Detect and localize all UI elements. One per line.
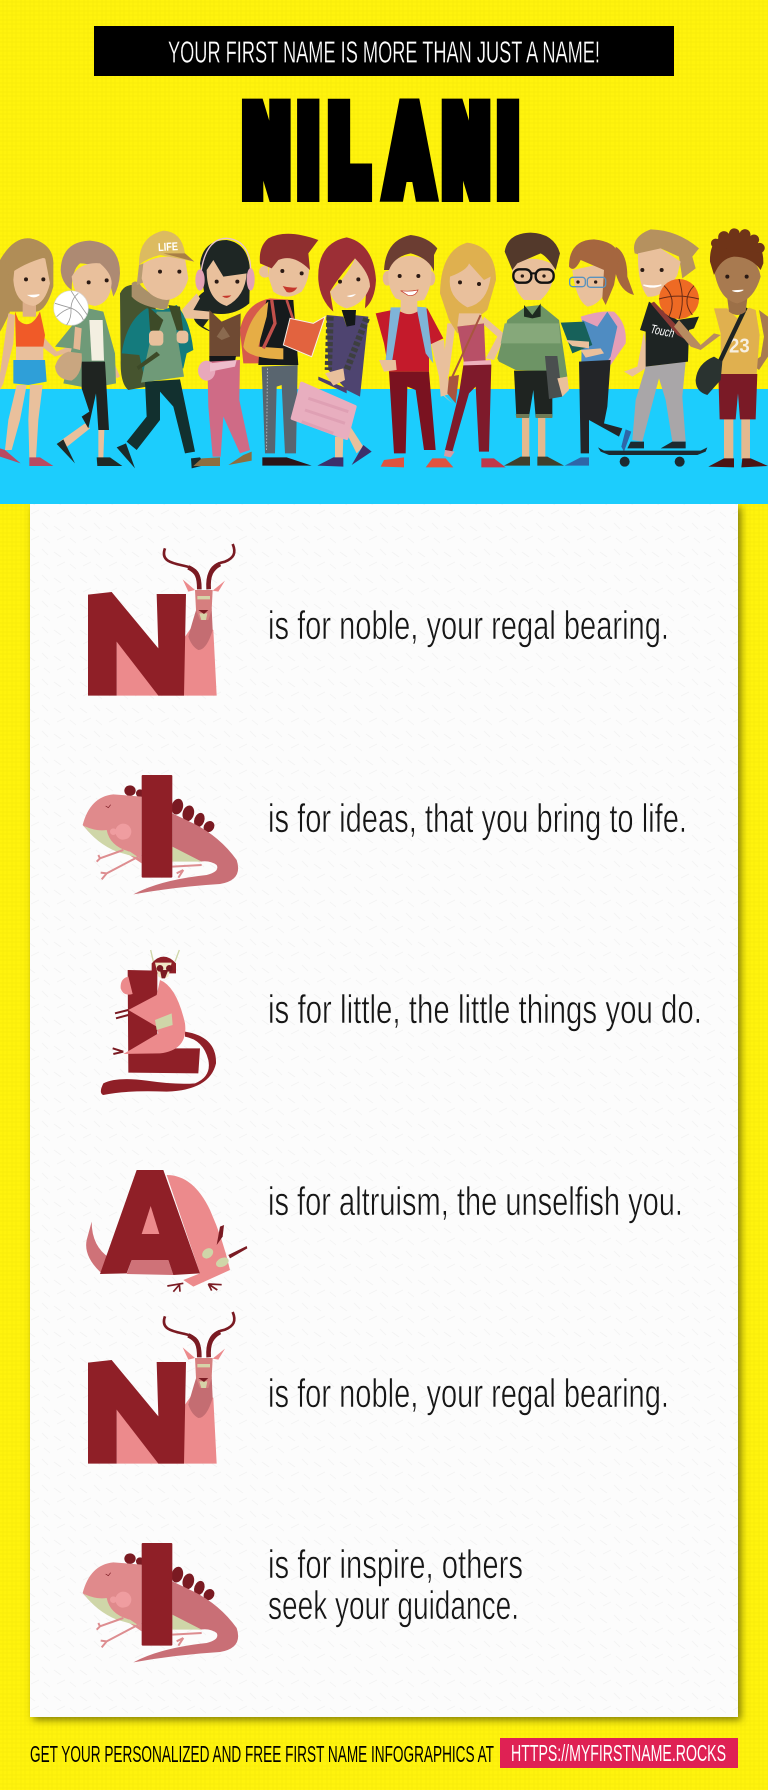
person 8: blonde girl — [440, 243, 506, 467]
row 5: second letter N with antelope — [88, 1312, 669, 1464]
person 7: boy in red t-shirt — [376, 235, 453, 467]
text: second I line — [268, 1543, 523, 1628]
icon: lemur L — [101, 950, 216, 1095]
row 1: letter N with antelope — [88, 544, 669, 696]
person 3: boy with cap and backpack: LIFE — [158, 241, 179, 254]
icon: lizard I — [83, 1543, 238, 1662]
icon: basketball — [659, 279, 699, 319]
person 12: boy in yellow tank top: 23 — [729, 335, 750, 358]
person 6: girl with pink handbag — [292, 237, 376, 467]
panel: white letter list — [30, 504, 738, 1717]
illustration: group of twelve students — [0, 228, 768, 468]
icon: antelope N — [88, 1312, 234, 1464]
person 1: girl in orange top — [0, 238, 82, 466]
left six students — [0, 231, 376, 468]
person 3: boy with cap and backpack — [117, 231, 205, 468]
text: second I line: is for inspire, others — [268, 1543, 523, 1587]
person 5: boy reading a book — [240, 234, 325, 466]
row 4: letter A with armadillo — [86, 1170, 683, 1292]
banner: top tagline bar — [94, 26, 674, 76]
row 2: letter I with lizard — [83, 775, 687, 894]
text: second I line: seek your guidance. — [268, 1584, 519, 1628]
skateboard — [598, 447, 707, 467]
row 3: letter L with lemur — [101, 950, 702, 1095]
icon: armadillo A — [86, 1170, 247, 1292]
right six students — [376, 228, 768, 467]
icon: lizard I — [83, 775, 238, 894]
person 9: boy with glasses — [497, 233, 569, 466]
person 12: boy in yellow tank top — [696, 228, 768, 467]
person 11: boy on skateboard: Touch — [649, 322, 676, 341]
person 4: girl with headphones — [182, 238, 255, 466]
person 11: boy on skateboard — [598, 229, 721, 467]
row 6: second letter I with lizard — [83, 1543, 523, 1662]
title: name: NILANI — [245, 88, 516, 213]
cyan floor band — [0, 389, 768, 504]
icon: antelope N — [88, 544, 234, 696]
footer — [30, 1738, 738, 1768]
icon: volleyball — [54, 291, 88, 325]
person 2: girl with volleyball — [54, 241, 122, 466]
person 10: girl with tablet — [561, 239, 634, 466]
